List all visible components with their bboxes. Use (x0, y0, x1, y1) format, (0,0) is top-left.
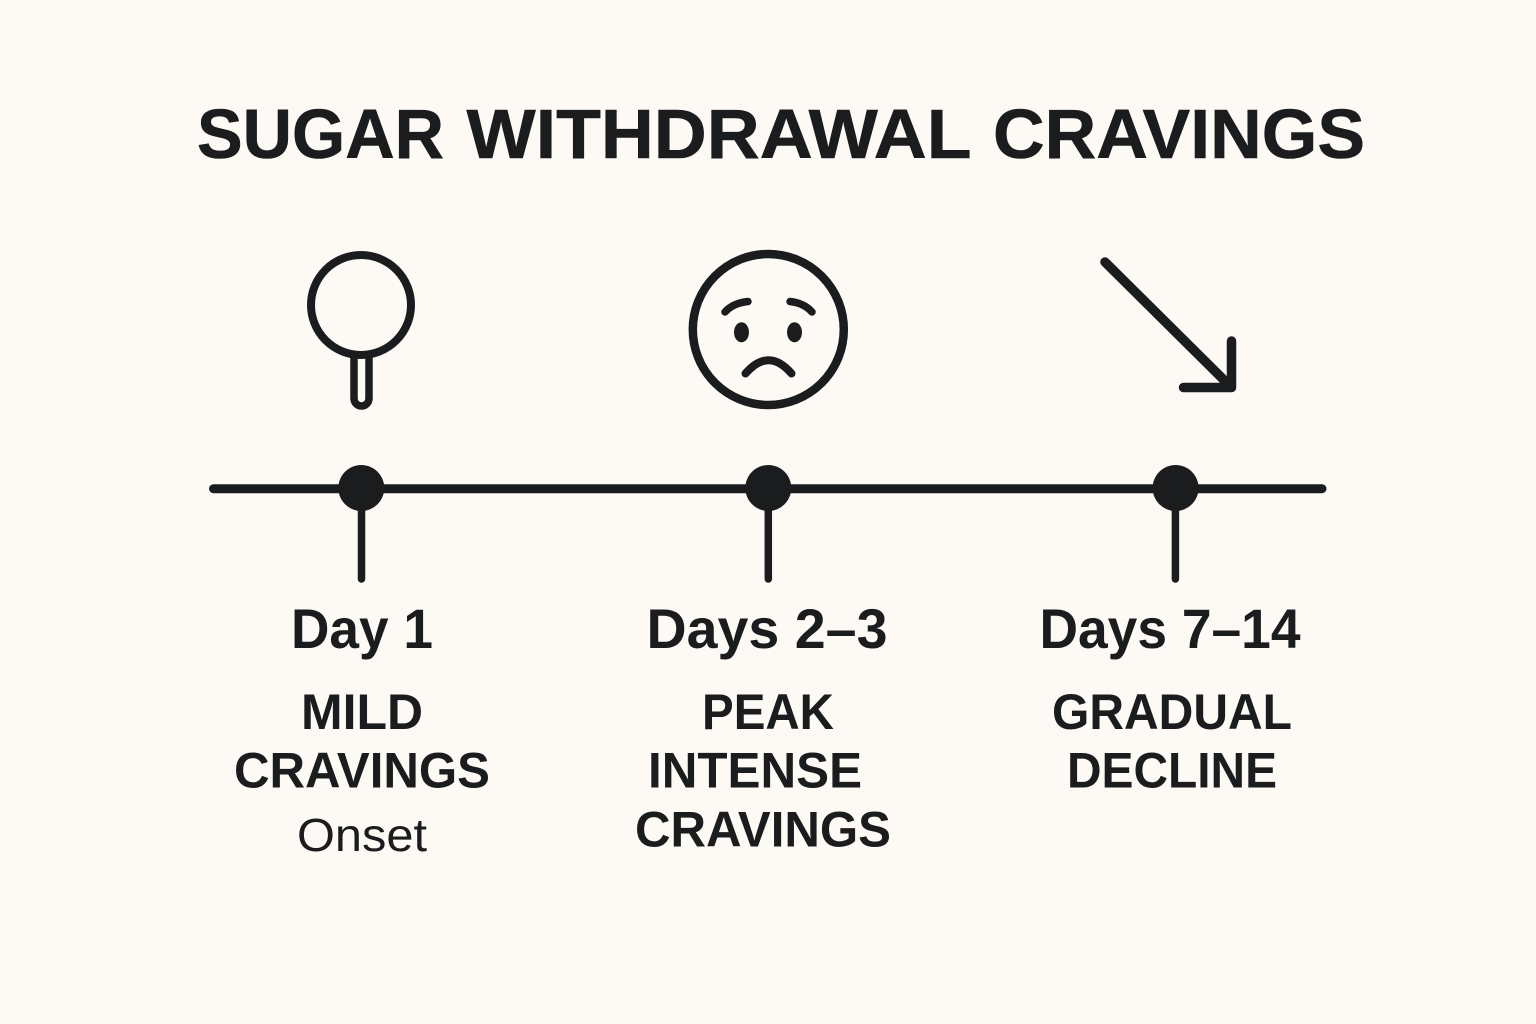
marker: days 2-3 (745, 465, 791, 579)
stage: day 1 (234, 597, 490, 861)
title: CRAVINGS (993, 95, 1365, 173)
title (197, 95, 1365, 173)
marker: days 7-14 (1153, 465, 1199, 579)
icon: down arrow (1105, 262, 1232, 388)
stage: days 2-3: CRAVINGS (635, 802, 891, 858)
icon: lollipop (311, 255, 411, 406)
stage: days 2-3: INTENSE (648, 742, 862, 798)
stage: days 2-3: Days 2–3 (646, 597, 888, 660)
icon: sad face (693, 254, 844, 405)
title: WITHDRAWAL (466, 95, 972, 173)
stage: day 1: Onset (297, 809, 427, 861)
stage: days 2-3 (635, 597, 891, 858)
stage: days 7-14 (1040, 597, 1300, 798)
stage: days 7-14: DECLINE (1067, 742, 1277, 798)
stage: day 1: Day 1 (291, 597, 433, 660)
stage: days 2-3: PEAK (702, 684, 834, 740)
title: SUGAR (197, 95, 444, 173)
stage: day 1: MILD (301, 684, 423, 740)
stage: days 7-14: Days 7–14 (1040, 597, 1300, 660)
stage: days 7-14: GRADUAL (1052, 684, 1292, 740)
timeline (214, 465, 1322, 579)
marker: day 1 (338, 465, 384, 579)
stage: day 1: CRAVINGS (234, 742, 490, 798)
